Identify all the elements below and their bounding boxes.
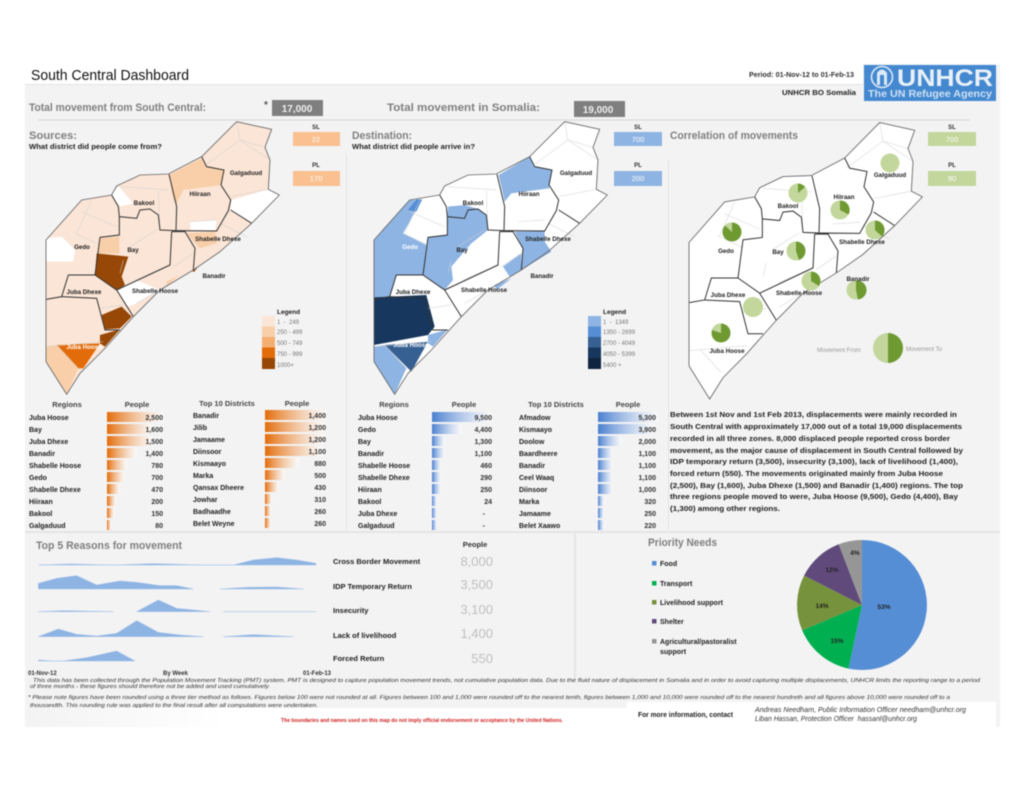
table: source regions: Shabelle Hoose bbox=[29, 463, 81, 470]
table: source regions: Gedo bbox=[29, 475, 47, 482]
map labels: correlation: Juba Hoose bbox=[709, 348, 745, 355]
table: source top 10 districts: Diinsoor bbox=[193, 449, 222, 456]
table: destination regions: Gedo bbox=[358, 427, 376, 434]
map labels: destination: Hiiraan bbox=[519, 191, 540, 198]
priority needs pie chart: 4% bbox=[850, 550, 860, 557]
reasons table: IDP Temporary Return bbox=[333, 582, 412, 591]
table: destination regions: Banadir bbox=[358, 451, 384, 458]
table: destination top 10 districts: 250 bbox=[644, 511, 656, 518]
destination PL box: 200 bbox=[632, 174, 644, 183]
priority needs legend: Livelihood support bbox=[660, 600, 724, 607]
table: destination top 10 districts: 2,000 bbox=[638, 439, 656, 446]
priority needs pie chart bbox=[797, 540, 927, 670]
reasons table: 8,000 bbox=[460, 554, 493, 569]
reasons table: 550 bbox=[471, 651, 493, 666]
table: destination top 10 districts: People bbox=[616, 400, 640, 409]
destination legend: 4050 - 5399 bbox=[603, 352, 636, 358]
correlation SL box: 700 bbox=[946, 135, 958, 144]
reasons table: Lack of livelihood bbox=[333, 631, 397, 640]
summary paragraph: IDP temporary return (3,500), insecurity (3,100), lack of livelihood (1,400), bbox=[670, 457, 958, 466]
sources legend: 250 - 499 bbox=[277, 330, 303, 336]
summary paragraph: recorded in all three zones. 8,000 displaced people reported cross border bbox=[670, 434, 950, 443]
reasons table: 3,500 bbox=[460, 577, 493, 592]
sources SL box: 22 bbox=[312, 135, 320, 144]
sources PL box: PL bbox=[312, 163, 320, 169]
reasons table: Insecurity bbox=[333, 606, 369, 615]
correlation PL box bbox=[928, 163, 976, 186]
table: destination top 10 districts: Top 10 Districts bbox=[528, 400, 584, 409]
total movement in Somalia bbox=[387, 101, 625, 117]
table: source top 10 districts: People bbox=[285, 399, 309, 408]
table: source top 10 districts: 1,400 bbox=[308, 413, 326, 420]
UNHCR logo bbox=[864, 65, 996, 101]
total movement from South Central bbox=[29, 100, 323, 116]
table: destination top 10 districts: Marka bbox=[519, 499, 539, 506]
table: destination regions: 460 bbox=[480, 463, 492, 470]
table: destination regions: - bbox=[483, 523, 486, 530]
map labels: correlation: Bay bbox=[772, 249, 784, 256]
table: source top 10 districts: Kismaayo bbox=[193, 461, 226, 468]
destination legend: 5400 + bbox=[603, 363, 622, 369]
heading: destination: Destination: bbox=[352, 130, 412, 142]
table: destination regions: 24 bbox=[484, 499, 492, 506]
table: source regions: Juba Hoose bbox=[29, 415, 69, 422]
table: destination top 10 districts: 1,100 bbox=[638, 475, 656, 482]
priority needs legend: Shelter bbox=[660, 619, 684, 626]
total movement in Somalia: 19,000 bbox=[583, 105, 614, 116]
table: destination regions: Hiiraan bbox=[358, 487, 382, 494]
map labels: destination: Gedo bbox=[402, 244, 418, 251]
map labels: destination: Banadir bbox=[530, 273, 554, 280]
map labels: correlation: Hiiraan bbox=[834, 194, 855, 201]
table: destination top 10 districts: 3,900 bbox=[638, 427, 656, 434]
destination SL box bbox=[614, 125, 662, 146]
footnotes: * Please note figures have been rounded using a three tier method as follows. Figures below 100 were not rounded at all. Figures between 100 and 1,000 were rounded off to the nearest tenth, figures between 1,000 and 10,000 were rounded off to the nearest hundreth and all figures above 10,000 were rounded off to a bbox=[28, 695, 951, 701]
map labels: destination: Shabelle Dhexe bbox=[525, 236, 571, 243]
table: source top 10 districts: 880 bbox=[314, 461, 326, 468]
heading: destination bbox=[352, 130, 475, 151]
table: destination regions: Bakool bbox=[358, 499, 381, 506]
destination legend: 1 - 1349 bbox=[603, 320, 629, 326]
total movement from South Central: 17,000 bbox=[282, 104, 313, 115]
table: destination top 10 districts: Banadir bbox=[519, 463, 545, 470]
footnotes: This data has been collected through the Population Movement Tracking (PMT) system. PMT is designed to capture population movement trends, not cumulative population data. Due to the fluid nature of displacement in Somalia and in order to avoid capturing multiple displacements, UNHCR limits the reporting range to a period bbox=[33, 678, 981, 684]
table: source top 10 districts: Badhaadhe bbox=[193, 509, 231, 516]
table: destination regions: Regions bbox=[379, 400, 409, 409]
total movement from South Central: Total movement from South Central: bbox=[29, 102, 206, 114]
priority needs legend: Food bbox=[660, 561, 677, 568]
summary paragraph: Between 1st Nov and 1st Feb 2013, displacements were mainly recorded in bbox=[670, 410, 958, 419]
destination SL box: 700 bbox=[632, 135, 644, 144]
heading: correlation: Correlation of movements bbox=[670, 130, 798, 142]
summary paragraph: three regions people moved to were, Juba Hoose (9,500), Gedo (4,400), Bay bbox=[670, 492, 959, 501]
correlation PL box: PL bbox=[948, 163, 956, 169]
table: destination top 10 districts bbox=[519, 400, 658, 530]
table: source regions: Bakool bbox=[29, 511, 52, 518]
map labels: correlation: Banadir bbox=[846, 276, 870, 283]
table: destination regions: - bbox=[483, 511, 486, 518]
map labels: sources bbox=[66, 170, 262, 351]
map labels: sources: Hiiraan bbox=[190, 191, 211, 198]
map labels: sources: Gedo bbox=[74, 244, 90, 251]
table: destination regions: 290 bbox=[480, 475, 492, 482]
summary paragraph: movement, as the major cause of displacement in South Central followed by bbox=[670, 446, 964, 455]
table: destination top 10 districts: 1,000 bbox=[638, 487, 656, 494]
priority needs legend: support bbox=[660, 649, 687, 656]
table: source regions: 1,400 bbox=[145, 451, 163, 458]
heading: sources: What district did people come from? bbox=[29, 144, 162, 151]
map labels: correlation: Juba Dhexe bbox=[711, 292, 746, 299]
table: source top 10 districts: Top 10 Districts bbox=[199, 399, 255, 408]
map: correlation base bbox=[689, 123, 922, 399]
destination PL box: PL bbox=[634, 163, 642, 169]
table: source regions: 1,500 bbox=[145, 439, 163, 446]
priority needs pie chart: 15% bbox=[830, 638, 844, 645]
table: source regions: Hiiraan bbox=[29, 499, 53, 506]
table: destination top 10 districts: Belet Xaawo bbox=[519, 523, 560, 530]
table: destination regions: Bay bbox=[358, 439, 371, 446]
map: destination choropleth bbox=[374, 122, 607, 394]
UNHCR logo: UNHCR bbox=[897, 65, 993, 92]
heading: priority needs: Priority Needs bbox=[648, 537, 717, 549]
correlation SL box bbox=[928, 125, 976, 146]
table: source top 10 districts: 260 bbox=[314, 521, 326, 528]
table: source regions: Shabelle Dhexe bbox=[29, 487, 81, 494]
table: source top 10 districts: Jowhar bbox=[193, 497, 218, 504]
table: source top 10 districts: 260 bbox=[314, 509, 326, 516]
table: source regions: Banadir bbox=[29, 451, 55, 458]
heading: top 5 reasons: Top 5 Reasons for movement bbox=[36, 540, 182, 552]
map labels: destination: Shabelle Hoose bbox=[461, 287, 508, 294]
table: destination regions: Shabelle Hoose bbox=[358, 463, 410, 470]
table: source regions: People bbox=[125, 400, 149, 409]
dashboard background panel bbox=[25, 64, 1000, 727]
sources legend bbox=[262, 309, 303, 369]
correlation pie legend: Movement To bbox=[906, 347, 943, 353]
priority needs pie chart: 12% bbox=[825, 567, 839, 574]
office text: UNHCR BO Somalia bbox=[782, 88, 857, 97]
map labels: destination: Galgaduud bbox=[560, 170, 592, 177]
map labels: correlation: Galgaduud bbox=[874, 172, 906, 179]
correlation pies bbox=[712, 154, 900, 342]
map labels: destination: Bakool bbox=[463, 200, 484, 207]
table: destination top 10 districts: Afmadow bbox=[519, 415, 551, 422]
priority needs legend: Agricultural/pastoralist bbox=[660, 639, 737, 646]
table: source top 10 districts: 1,200 bbox=[308, 425, 326, 432]
area charts: weekly trend per reason bbox=[38, 558, 316, 661]
title: South Central Dashboard bbox=[31, 68, 189, 84]
contact box: For more information, contact bbox=[638, 710, 733, 719]
chart axis labels bbox=[28, 671, 332, 677]
summary paragraph: forced return (550). The movements originated mainly from Juba Hoose bbox=[670, 469, 943, 478]
table: source top 10 districts: 1,200 bbox=[308, 437, 326, 444]
table: source top 10 districts: Banadir bbox=[193, 413, 219, 420]
reasons table: 1,400 bbox=[460, 626, 493, 641]
destination legend bbox=[588, 309, 636, 369]
table: source regions: 2,500 bbox=[145, 415, 163, 422]
sources legend: 1 - 249 bbox=[277, 320, 300, 326]
map labels: destination: Juba Hoose bbox=[393, 342, 429, 349]
map: sources choropleth bbox=[46, 122, 279, 394]
table: source top 10 districts bbox=[193, 399, 327, 528]
map labels: correlation: Shabelle Dhexe bbox=[839, 239, 885, 246]
map labels: sources: Bay bbox=[127, 247, 139, 254]
contact box: Liban Hassan, Protection Officer hassanl@unhcr.org bbox=[755, 716, 917, 723]
map labels: sources: Juba Hoose bbox=[66, 344, 102, 351]
destination legend: Legend bbox=[603, 309, 626, 316]
reasons table: Cross Border Movement bbox=[333, 557, 421, 566]
table: source top 10 districts: Jamaame bbox=[193, 437, 225, 444]
total movement in Somalia: Total movement in Somalia: bbox=[387, 102, 540, 114]
table: source regions: 80 bbox=[155, 523, 163, 530]
table: destination top 10 districts: 5,300 bbox=[638, 415, 656, 422]
title bar bbox=[25, 64, 863, 85]
table: source top 10 districts: Qansax Dheere bbox=[193, 485, 244, 492]
map labels: destination: Juba Dhexe bbox=[396, 289, 431, 296]
UNHCR logo: The UN Refugee Agency bbox=[868, 89, 992, 100]
table: source regions: 700 bbox=[151, 475, 163, 482]
footnotes: thousandth. This rounding rule was applied to the final result after all computations were undertaken. bbox=[30, 703, 318, 709]
table: destination regions: 9,500 bbox=[474, 415, 492, 422]
summary paragraph: (2,500), Bay (1,600), Juba Dhexe (1,500) and Banadir (1,400) regions. The top bbox=[670, 481, 964, 490]
table: destination top 10 districts: Jamaame bbox=[519, 511, 551, 518]
table: source top 10 districts: Belet Weyne bbox=[193, 521, 235, 528]
table: destination top 10 districts: Diinsoor bbox=[519, 487, 548, 494]
priority needs pie chart: 14% bbox=[815, 603, 829, 610]
reasons table: People bbox=[463, 540, 487, 549]
table: source regions: Regions bbox=[52, 400, 82, 409]
sources legend: 1000+ bbox=[277, 363, 294, 369]
table: source regions: Bay bbox=[29, 427, 42, 434]
table: destination top 10 districts: Kismaayo bbox=[519, 427, 552, 434]
table: source regions: Juba Dhexe bbox=[29, 439, 68, 446]
table: source top 10 districts: 1,100 bbox=[308, 449, 326, 456]
map labels: destination: Bay bbox=[456, 247, 468, 254]
map labels: sources: Shabelle Dhexe bbox=[195, 236, 241, 243]
destination legend: 1350 - 2699 bbox=[603, 330, 636, 336]
table: destination regions: Juba Hoose bbox=[358, 415, 398, 422]
total movement from South Central: * bbox=[264, 100, 268, 111]
map labels: sources: Shabelle Hoose bbox=[132, 288, 179, 295]
map labels: sources: Juba Dhexe bbox=[67, 289, 102, 296]
period text: Period: 01-Nov-12 to 01-Feb-13 bbox=[749, 72, 854, 79]
map labels: correlation: Bakool bbox=[778, 203, 799, 210]
sources PL box: 170 bbox=[310, 174, 322, 183]
table: destination regions: 1,300 bbox=[474, 439, 492, 446]
table: source regions: 1,600 bbox=[145, 427, 163, 434]
sources legend: 500 - 749 bbox=[277, 341, 303, 347]
table: source top 10 districts: 310 bbox=[314, 497, 326, 504]
heading: destination: What district did people arrive in? bbox=[352, 144, 475, 151]
map disclaimer: The boundaries and names used on this map do not imply official endorsement or acceptance by the United Nations. bbox=[281, 718, 564, 724]
sources SL box: SL bbox=[312, 125, 320, 131]
priority needs legend: Transport bbox=[660, 581, 693, 588]
table: source top 10 districts: Jilib bbox=[193, 425, 207, 432]
table: destination top 10 districts: Doolow bbox=[519, 439, 545, 446]
table: destination regions: Galgaduud bbox=[358, 523, 395, 530]
map labels: sources: Galgaduud bbox=[230, 170, 262, 177]
table: source regions: 200 bbox=[151, 499, 163, 506]
reasons table: 3,100 bbox=[460, 602, 493, 617]
table: source regions: 780 bbox=[151, 463, 163, 470]
summary paragraph: (1,300) among other regions. bbox=[670, 504, 780, 513]
heading: sources: Sources: bbox=[29, 130, 77, 142]
footnotes bbox=[28, 678, 981, 709]
contact box bbox=[627, 702, 996, 727]
table: destination top 10 districts: 1,100 bbox=[638, 451, 656, 458]
table: source regions: Galgaduud bbox=[29, 523, 66, 530]
map labels: destination bbox=[393, 170, 592, 349]
sources legend: Legend bbox=[277, 309, 300, 316]
reasons table: Forced Return bbox=[333, 654, 385, 663]
destination SL box: SL bbox=[634, 125, 642, 131]
table: destination top 10 districts: 220 bbox=[644, 523, 656, 530]
table: source regions: 150 bbox=[151, 511, 163, 518]
table: source regions bbox=[29, 400, 163, 530]
table: destination regions: Shabelle Dhexe bbox=[358, 475, 410, 482]
footnotes: of three months - these figures should therefore not be added and used cumulatively. bbox=[30, 684, 270, 690]
map labels: sources: Banadir bbox=[202, 273, 226, 280]
priority needs pie chart: 53% bbox=[877, 604, 891, 611]
chart axis labels: 01-Nov-12 bbox=[28, 671, 57, 677]
chart axis labels: 01-Feb-13 bbox=[303, 671, 332, 677]
table: destination top 10 districts: Ceel Waaq bbox=[519, 475, 554, 482]
map labels: correlation: Shabelle Hoose bbox=[776, 290, 823, 297]
table: destination regions: 4,400 bbox=[474, 427, 492, 434]
correlation PL box: 90 bbox=[948, 174, 956, 183]
heading: sources bbox=[29, 130, 162, 151]
table: destination regions: 1,100 bbox=[474, 451, 492, 458]
sources SL box bbox=[293, 125, 340, 146]
reasons table bbox=[333, 540, 493, 666]
correlation pie legend bbox=[817, 333, 943, 363]
destination PL box bbox=[614, 163, 662, 186]
summary paragraph: South Central with approximately 17,000 out of a total 19,000 displacements bbox=[670, 422, 962, 431]
table: destination regions bbox=[358, 400, 492, 530]
table: destination regions: Juba Dhexe bbox=[358, 511, 397, 518]
sources legend: 750 - 999 bbox=[277, 352, 303, 358]
table: destination regions: 250 bbox=[480, 487, 492, 494]
table: destination top 10 districts: Baardheere bbox=[519, 451, 558, 458]
table: source regions: 470 bbox=[151, 487, 163, 494]
contact box: Andreas Needham, Public Information Officer needham@unhcr.org bbox=[754, 707, 966, 714]
sources PL box bbox=[293, 163, 340, 186]
table: destination regions: People bbox=[452, 400, 476, 409]
table: source top 10 districts: Marka bbox=[193, 473, 213, 480]
table: source top 10 districts: 430 bbox=[314, 485, 326, 492]
destination legend: 2700 - 4049 bbox=[603, 341, 636, 347]
table: source top 10 districts: 500 bbox=[314, 473, 326, 480]
correlation pie legend: Movement From bbox=[817, 348, 861, 354]
map labels: sources: Bakool bbox=[134, 200, 155, 207]
table: destination top 10 districts: 1,100 bbox=[638, 463, 656, 470]
summary paragraph bbox=[670, 410, 964, 513]
priority needs legend bbox=[652, 561, 737, 656]
map labels: correlation bbox=[709, 172, 906, 355]
footer white area bbox=[25, 708, 627, 727]
correlation SL box: SL bbox=[948, 125, 956, 131]
table: destination top 10 districts: 320 bbox=[644, 499, 656, 506]
chart axis labels: By Week bbox=[163, 671, 189, 677]
map labels: correlation: Gedo bbox=[718, 248, 734, 255]
